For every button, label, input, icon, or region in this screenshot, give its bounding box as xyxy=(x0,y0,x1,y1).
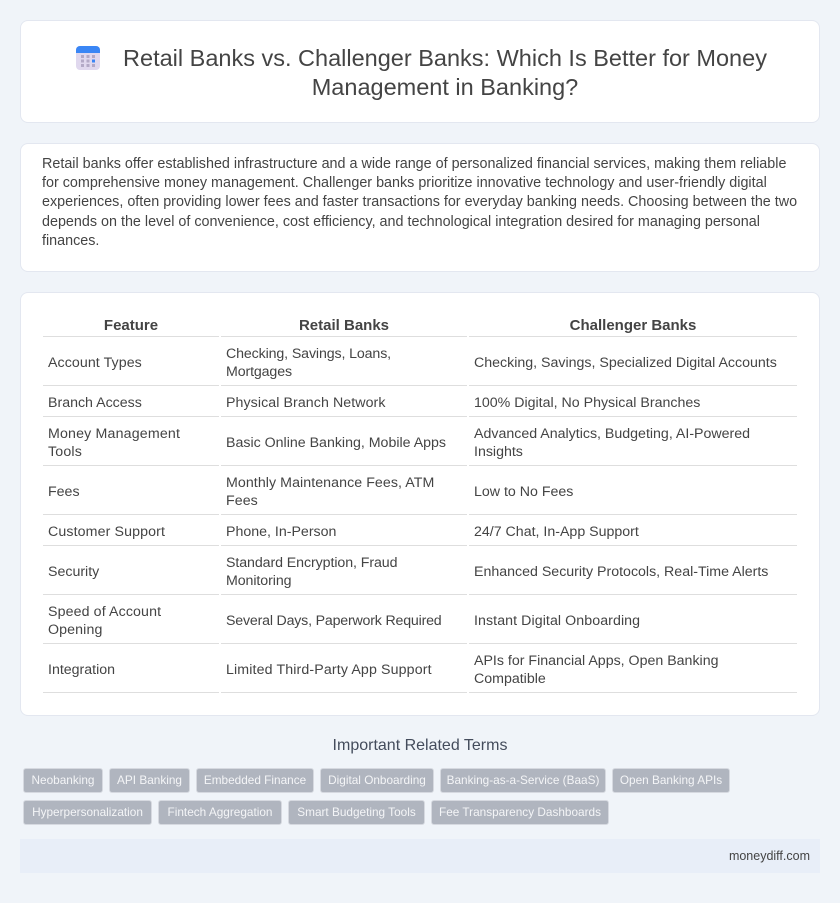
comparison table: Mortgages xyxy=(226,364,292,380)
comparison table: Opening xyxy=(48,622,102,638)
tags: related terms: Open Banking APIs xyxy=(620,773,722,787)
comparison table: Limited Third-Party App Support xyxy=(226,662,432,678)
text block: introduction: depends on the level of convenience, cost efficiency, and technological integration desired for managing personal xyxy=(42,214,760,230)
panel: comparison table xyxy=(20,292,820,716)
tags: related terms: Neobanking xyxy=(32,773,94,787)
text block: introduction: Retail banks offer established infrastructure and a wide range of personalized financial services, making them reliable xyxy=(42,156,786,172)
comparison table: Integration xyxy=(48,662,115,678)
text block: introduction: experiences, often providing lower fees and faster transactions for everyday banking needs. Choosing between the two xyxy=(42,194,797,210)
panel: header xyxy=(20,20,820,123)
footer xyxy=(20,839,820,873)
panel: introduction xyxy=(20,143,820,272)
comparison table: Monitoring xyxy=(226,573,291,589)
comparison table: Challenger Banks xyxy=(570,317,696,334)
text block: introduction: finances. xyxy=(42,233,99,249)
comparison table: Physical Branch Network xyxy=(226,395,386,411)
comparison table: Money Management xyxy=(48,426,180,442)
title: Retail Banks vs. Challenger Banks: Which Is Better for Money xyxy=(123,45,767,71)
comparison table: Feature xyxy=(104,317,158,334)
comparison table: 100% Digital, No Physical Branches xyxy=(474,395,700,411)
tags: related terms: Fee Transparency Dashboards xyxy=(439,805,601,819)
tags: related terms: API Banking xyxy=(117,773,182,787)
comparison table: Insights xyxy=(474,444,523,460)
tags: related terms: Hyperpersonalization xyxy=(32,805,143,819)
icon: calendar xyxy=(76,46,100,70)
comparison table: Instant Digital Onboarding xyxy=(474,613,640,629)
comparison table: Checking, Savings, Loans, xyxy=(226,346,391,362)
comparison table: Phone, In-Person xyxy=(226,524,336,540)
comparison table: Customer Support xyxy=(48,524,165,540)
comparison table xyxy=(43,317,797,693)
comparison table: Account Types xyxy=(48,355,142,371)
comparison table: Several Days, Paperwork Required xyxy=(226,613,442,629)
comparison table: Retail Banks xyxy=(299,317,389,334)
comparison table: Security xyxy=(48,564,99,580)
comparison table: Monthly Maintenance Fees, ATM xyxy=(226,475,434,491)
comparison table: Advanced Analytics, Budgeting, AI-Powered xyxy=(474,426,750,442)
comparison table: Branch Access xyxy=(48,395,142,411)
comparison table: Speed of Account xyxy=(48,604,161,620)
tags: related terms: Banking-as-a-Service (BaaS) xyxy=(447,773,599,787)
comparison table: Low to No Fees xyxy=(474,484,573,500)
text block: introduction: for comprehensive money management. Challenger banks prioritize innovative technology and user-friendly digital xyxy=(42,175,767,191)
comparison table: Checking, Savings, Specialized Digital Accounts xyxy=(474,355,777,371)
comparison table: Tools xyxy=(48,444,82,460)
tags: related terms: Digital Onboarding xyxy=(328,773,426,787)
tags: related terms: Embedded Finance xyxy=(204,773,306,787)
comparison table: Compatible xyxy=(474,671,546,687)
tags: related terms xyxy=(23,768,730,825)
comparison table: Fees xyxy=(226,493,258,509)
heading: related terms: Important Related Terms xyxy=(333,737,507,754)
tags: related terms: Smart Budgeting Tools xyxy=(297,805,416,819)
comparison table: Basic Online Banking, Mobile Apps xyxy=(226,435,446,451)
comparison table: Enhanced Security Protocols, Real-Time Alerts xyxy=(474,564,768,580)
title: Management in Banking? xyxy=(312,74,578,100)
footer: moneydiff.com xyxy=(729,849,810,863)
comparison table: Standard Encryption, Fraud xyxy=(226,555,397,571)
comparison table: 24/7 Chat, In-App Support xyxy=(474,524,639,540)
comparison table: APIs for Financial Apps, Open Banking xyxy=(474,653,718,669)
title xyxy=(123,45,767,100)
text block: introduction xyxy=(42,156,797,249)
comparison table: Fees xyxy=(48,484,80,500)
tags: related terms: Fintech Aggregation xyxy=(168,805,272,819)
